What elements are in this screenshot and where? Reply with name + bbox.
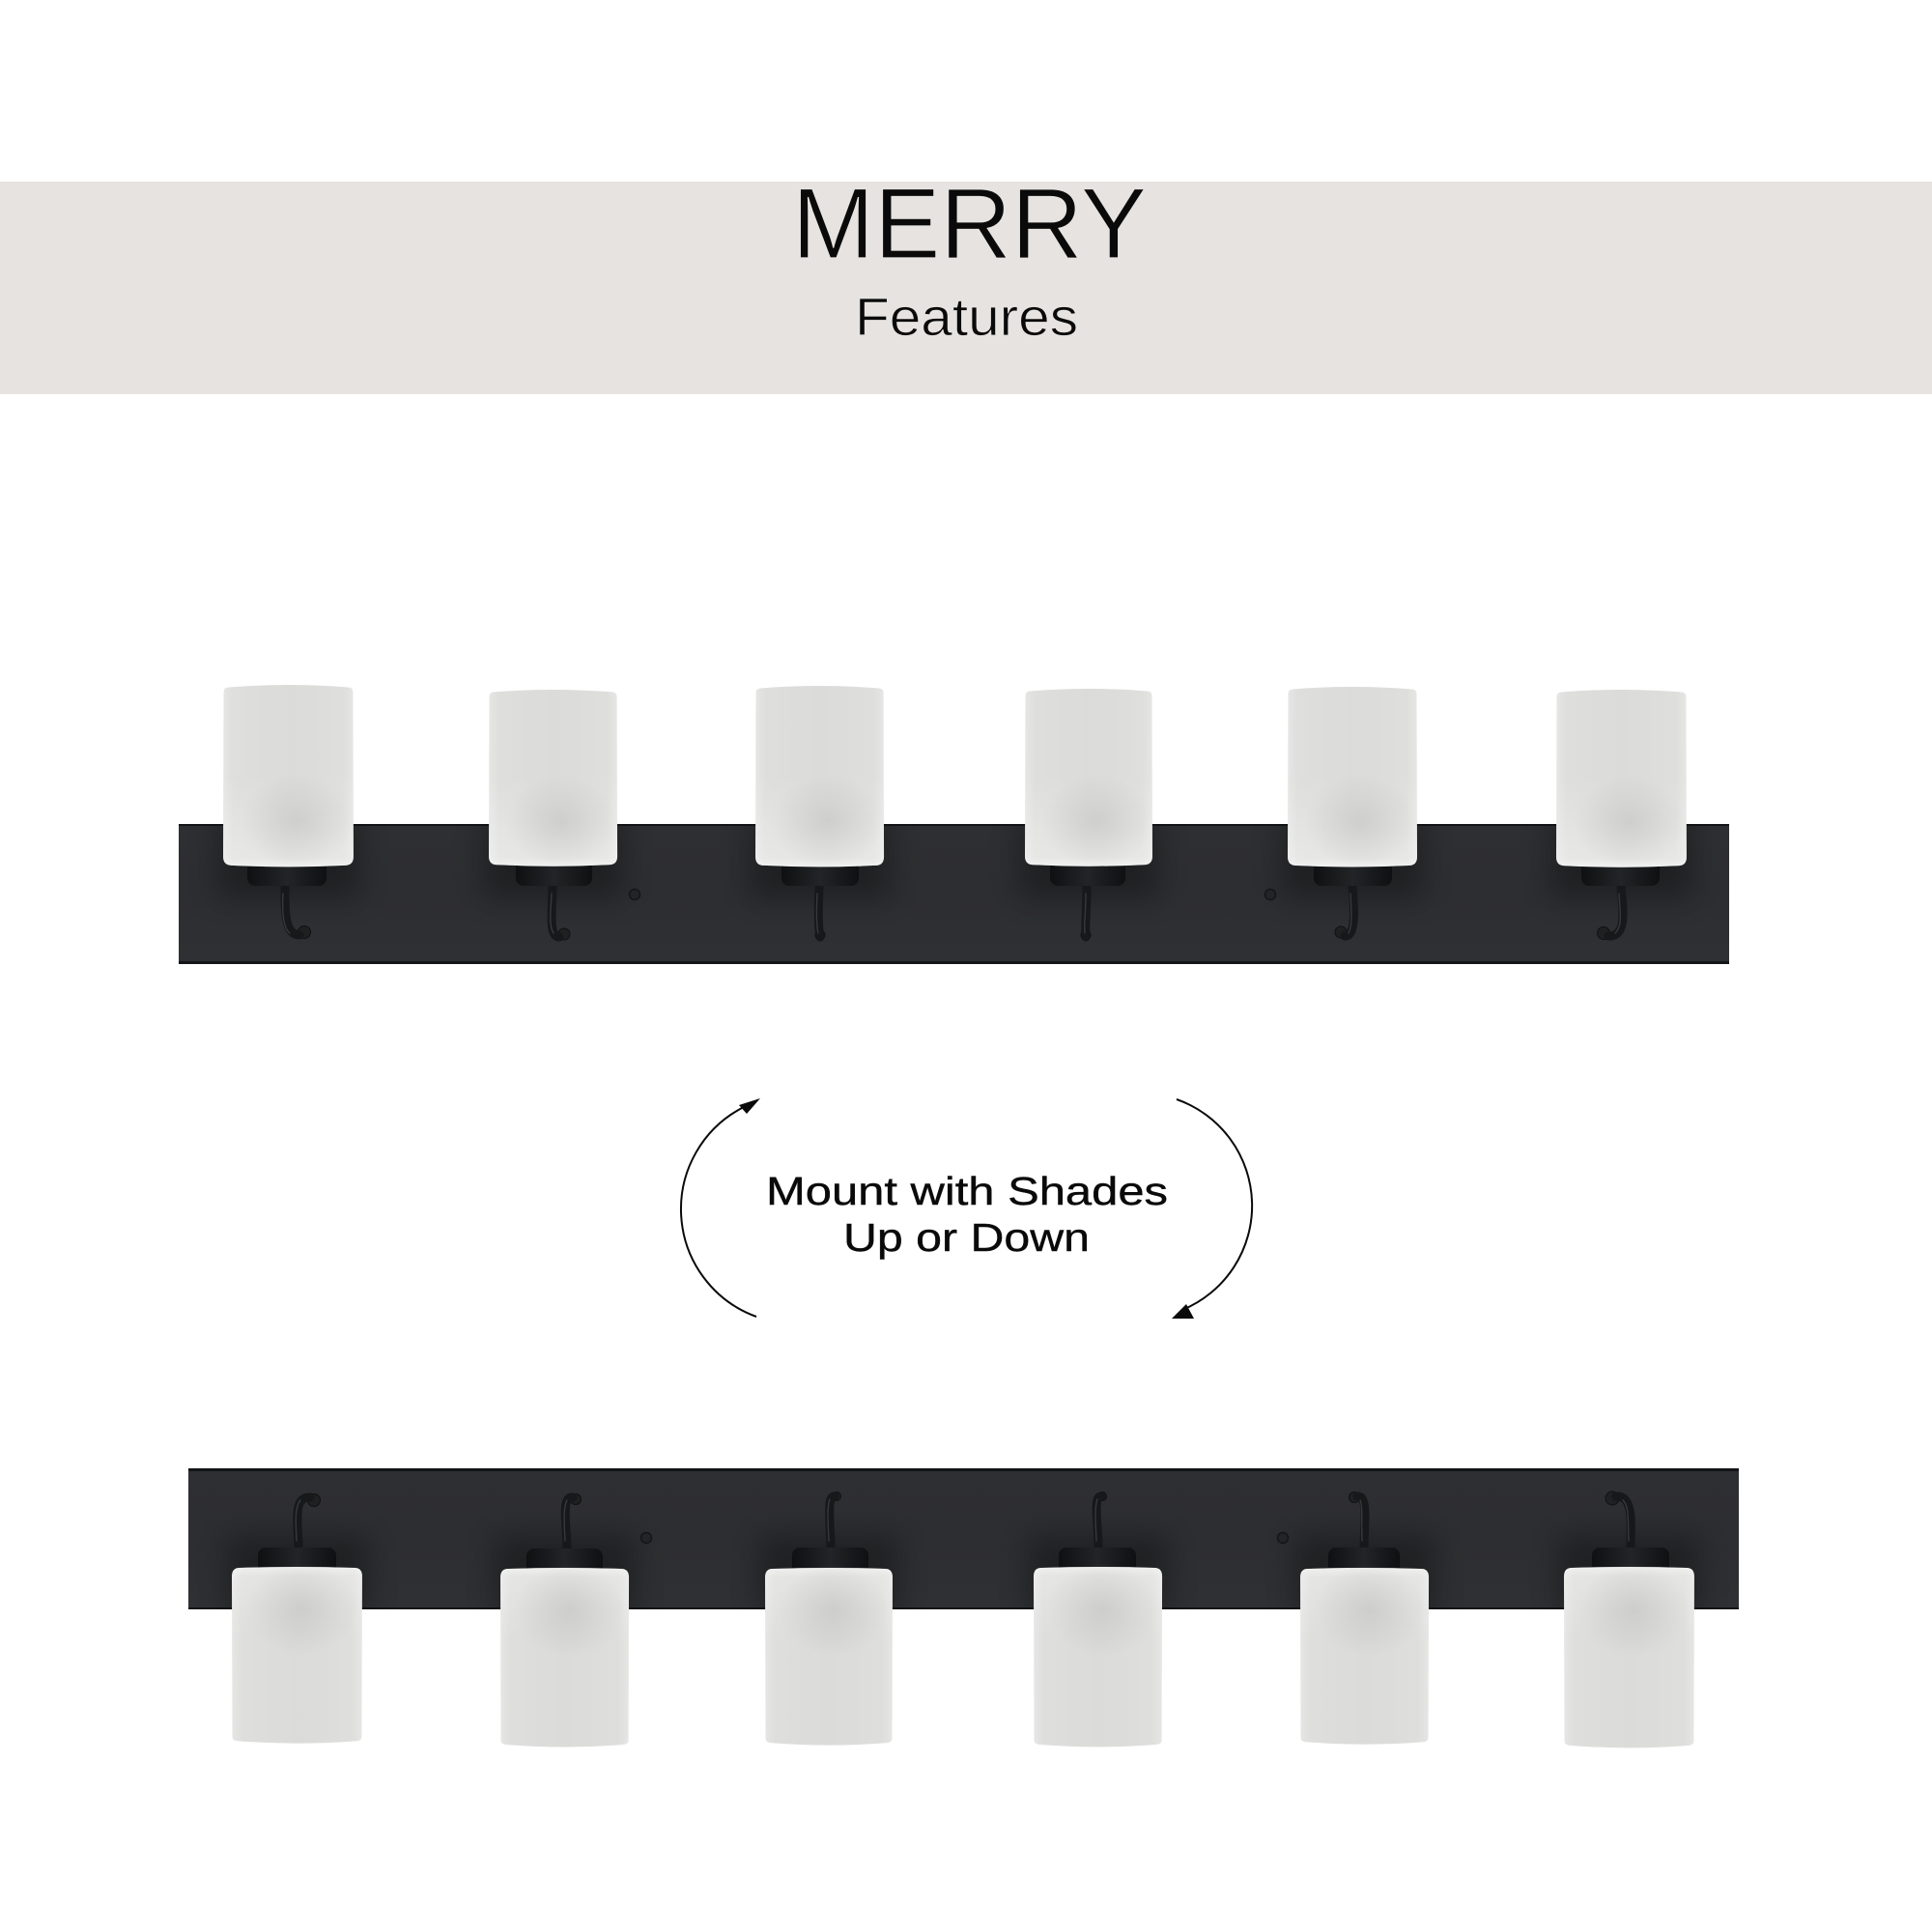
light fixture: shades down xyxy=(188,1468,1739,1747)
title: MERRY xyxy=(792,168,1147,280)
mounting holes xyxy=(630,889,1275,900)
arrow: left arc xyxy=(681,1098,760,1317)
light fixture: shades up xyxy=(179,685,1729,964)
callout text: Mount with Shades xyxy=(766,1169,1168,1213)
subtitle: Features xyxy=(855,287,1078,347)
lamp 4 xyxy=(1034,1492,1162,1747)
mounting holes xyxy=(641,1532,1289,1544)
callout text: Up or Down xyxy=(843,1215,1090,1260)
header band xyxy=(0,168,1932,394)
lamp 2 xyxy=(500,1493,629,1747)
callout text xyxy=(766,1169,1168,1260)
lamp 6 xyxy=(1564,1492,1694,1747)
backplate bottom xyxy=(188,1468,1739,1618)
rotation callout xyxy=(681,1098,1252,1319)
lamp 5 xyxy=(1300,1492,1429,1745)
backplate top xyxy=(179,816,1729,964)
lamp 1 xyxy=(223,685,354,939)
lamp 3 xyxy=(765,1492,893,1746)
lamp 3 xyxy=(755,686,884,940)
lamp 6 xyxy=(1556,690,1687,939)
lamp 1 xyxy=(232,1493,362,1744)
arrow: right arc xyxy=(1172,1099,1252,1319)
lamp 2 xyxy=(489,690,617,940)
lamp 4 xyxy=(1025,689,1152,940)
lamp 5 xyxy=(1288,687,1417,938)
